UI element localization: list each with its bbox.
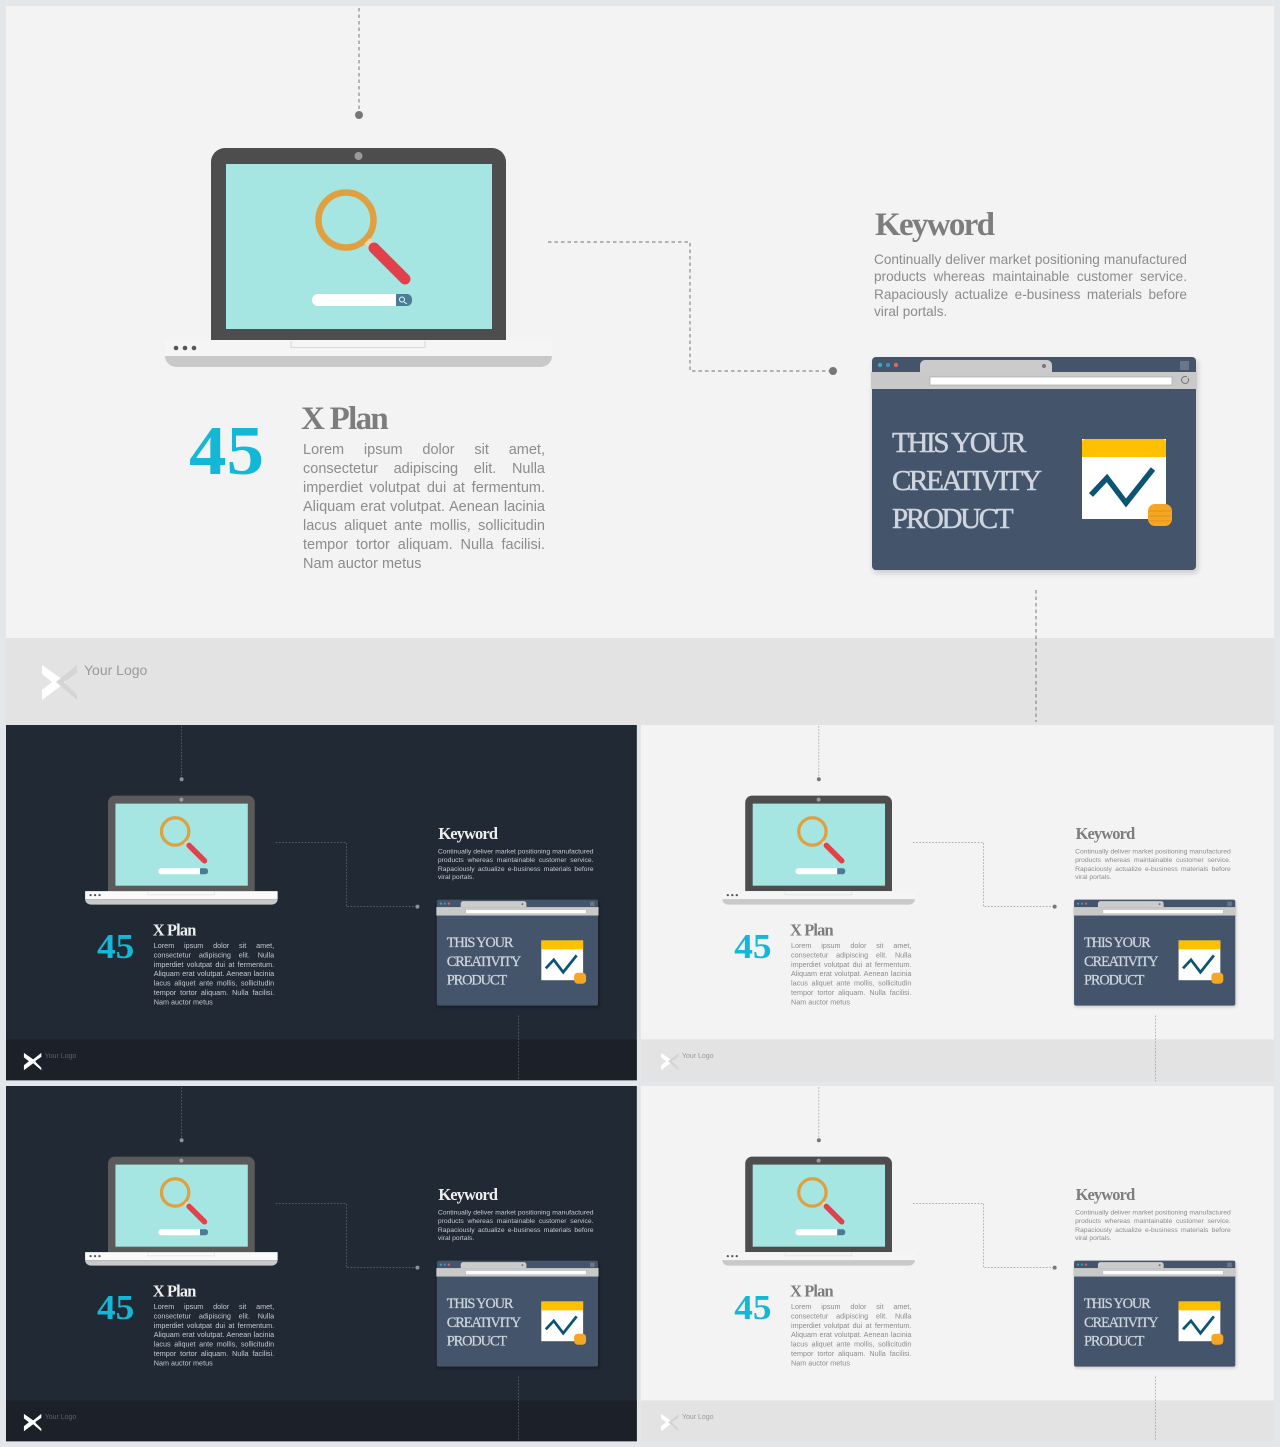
text block: X Plan description: tempor tortor aliquam. Nulla facilisi. — [791, 989, 911, 997]
connector: browser to bottom — [517, 1377, 519, 1442]
text block: Keyword description: Rapaciously actualize e-business materials before — [874, 286, 1187, 302]
text block: Keyword description: products whereas maintainable customer service. — [438, 1217, 594, 1224]
icon: browser window with product text: THIS YOUR — [892, 427, 1027, 459]
heading: Keyword: Keyword — [875, 207, 995, 243]
logo text: Your Logo — [682, 1414, 714, 1421]
heading: Keyword: Keyword — [1076, 1185, 1135, 1204]
text block: X Plan description: Lorem ipsum dolor sit amet, — [154, 1303, 274, 1311]
footer band — [641, 1039, 1275, 1084]
text block: Keyword description — [438, 1208, 594, 1242]
logo mark — [661, 1414, 679, 1431]
connector: laptop to browser — [276, 1203, 419, 1270]
logo text: Your Logo — [45, 1414, 76, 1421]
number 45: 45 — [189, 413, 264, 490]
connector: top line to laptop — [355, 8, 363, 119]
footer band — [6, 1039, 637, 1084]
text block: Keyword description: Continually deliver market positioning manufactured — [874, 252, 1187, 266]
heading: X Plan: X Plan — [301, 401, 388, 437]
text block: X Plan description — [303, 442, 545, 572]
text block: Keyword description: viral portals. — [874, 304, 947, 319]
text block: X Plan description: Aliquam erat volutpat. Aenean lacinia — [154, 970, 274, 978]
panel: dark slide, row 2 — [6, 1086, 637, 1441]
icon: browser window with product text: THIS YOUR — [447, 1296, 514, 1312]
heading: X Plan: X Plan — [153, 1281, 196, 1300]
connector: top line to laptop — [817, 1087, 821, 1142]
text block: X Plan description: Lorem ipsum dolor sit amet, — [791, 942, 911, 950]
panel: main light slide — [6, 6, 1274, 725]
icon: browser window with product text — [436, 1261, 599, 1368]
icon: browser window with product text — [436, 900, 599, 1007]
connector: laptop to browser — [548, 242, 837, 375]
connector: browser to bottom — [1035, 590, 1037, 722]
text block: X Plan description: imperdiet volutpat dui at fermentum. — [791, 961, 911, 969]
text block: X Plan description: lacus aliquet ante mollis, sollicitudin — [154, 1341, 274, 1349]
text block: X Plan description: lacus aliquet ante mollis, sollicitudin — [791, 1341, 911, 1349]
icon: browser window with product text: PRODUCT — [447, 1334, 507, 1350]
icon: browser window with product text: CREATIVITY — [892, 465, 1042, 497]
icon: laptop with magnifier — [722, 1157, 915, 1266]
logo text: Your Logo — [84, 662, 148, 678]
text block: X Plan description: tempor tortor aliquam. Nulla facilisi. — [154, 1350, 274, 1358]
text block: Keyword description: viral portals. — [1075, 1234, 1112, 1242]
text block: Keyword description: Rapaciously actualize e-business materials before — [1075, 865, 1231, 872]
text block: X Plan description: Aliquam erat volutpat. Aenean lacinia — [154, 1331, 274, 1339]
connector: top line to laptop — [180, 726, 184, 781]
icon: browser window with product text — [1074, 900, 1236, 1007]
icon: laptop with magnifier — [85, 796, 278, 905]
icon: browser window with product text: CREATIVITY — [1084, 954, 1159, 970]
text block: X Plan description: lacus aliquet ante mollis, sollicitudin — [303, 518, 545, 534]
logo text: Your Logo — [45, 1053, 76, 1060]
icon: laptop with magnifier — [85, 1157, 278, 1266]
connector: laptop to browser — [913, 1203, 1057, 1270]
text block: X Plan description: Lorem ipsum dolor sit amet, — [791, 1303, 911, 1311]
icon: laptop with magnifier — [722, 796, 915, 905]
connector: top line to laptop — [817, 726, 821, 781]
text block: X Plan description: Aliquam erat volutpat. Aenean lacinia — [791, 970, 911, 978]
heading: X Plan: X Plan — [790, 920, 834, 939]
text block: X Plan description: Lorem ipsum dolor sit amet, — [154, 942, 274, 950]
text block: Keyword description: Rapaciously actualize e-business materials before — [438, 1226, 594, 1233]
icon: browser window with product text: CREATIVITY — [447, 954, 522, 970]
text block: Keyword description — [874, 252, 1187, 319]
connector: browser to bottom — [1155, 1377, 1157, 1442]
text block: Keyword description: Rapaciously actualize e-business materials before — [438, 865, 594, 872]
icon: laptop with magnifier — [165, 148, 552, 367]
text block: X Plan description — [791, 1303, 912, 1368]
panel: dark slide, row 1 — [6, 725, 637, 1080]
heading: Keyword: Keyword — [438, 1185, 498, 1204]
connector: top line to laptop — [180, 1087, 184, 1142]
text block: X Plan description: tempor tortor aliquam. Nulla facilisi. — [303, 537, 545, 553]
text block: X Plan description: lacus aliquet ante mollis, sollicitudin — [791, 980, 911, 988]
logo mark — [42, 665, 77, 700]
text block: Keyword description: viral portals. — [1075, 873, 1112, 881]
connector: browser to bottom — [1155, 1016, 1157, 1081]
text block: Keyword description: products whereas maintainable customer service. — [1075, 1217, 1231, 1224]
text block: X Plan description: lacus aliquet ante mollis, sollicitudin — [154, 980, 274, 988]
icon: browser window with product text — [1074, 1261, 1236, 1368]
text block: X Plan description: Nam auctor metus — [303, 556, 421, 572]
icon: browser window with product text: THIS YOUR — [447, 935, 514, 951]
text block: X Plan description — [154, 942, 274, 1007]
text block: Keyword description: products whereas maintainable customer service. — [1075, 856, 1231, 863]
panel: light slide, row 2 — [641, 1086, 1274, 1441]
text block: Keyword description — [1075, 847, 1231, 881]
heading: X Plan: X Plan — [153, 920, 196, 939]
heading: Keyword: Keyword — [438, 824, 498, 843]
heading: Keyword: Keyword — [1076, 824, 1135, 843]
text block: X Plan description: Nam auctor metus — [791, 1360, 850, 1368]
text block: X Plan description: consectetur adipiscing elit. Nulla — [791, 951, 911, 959]
icon: browser window with product text: PRODUCT — [892, 503, 1014, 535]
text block: Keyword description: Continually deliver market positioning manufactured — [438, 847, 594, 855]
text block: Keyword description: products whereas maintainable customer service. — [874, 269, 1187, 284]
footer band — [641, 1400, 1275, 1445]
connector: laptop to browser — [276, 842, 419, 909]
text block: X Plan description: Nam auctor metus — [154, 999, 213, 1007]
text block: Keyword description: products whereas maintainable customer service. — [438, 856, 594, 863]
logo mark — [24, 1414, 41, 1431]
connector: laptop to browser — [913, 842, 1057, 909]
logo mark — [661, 1053, 679, 1070]
icon: browser window with product text — [871, 357, 1198, 573]
text block: Keyword description: Continually deliver market positioning manufactured — [438, 1208, 594, 1216]
text block: X Plan description — [791, 942, 912, 1007]
text block: X Plan description: tempor tortor aliquam. Nulla facilisi. — [791, 1350, 911, 1358]
footer band — [6, 1400, 637, 1445]
text block: Keyword description: viral portals. — [438, 1234, 474, 1242]
text block: Keyword description: viral portals. — [438, 873, 474, 881]
icon: browser window with product text: PRODUCT — [447, 973, 507, 989]
text block: X Plan description: Aliquam erat volutpat. Aenean lacinia — [791, 1331, 911, 1339]
icon: browser window with product text: CREATIVITY — [1084, 1315, 1159, 1331]
text block: X Plan description: consectetur adipiscing elit. Nulla — [791, 1312, 911, 1320]
footer band — [6, 638, 1274, 728]
text block: X Plan description: consectetur adipiscing elit. Nulla — [303, 461, 545, 477]
text block: X Plan description: imperdiet volutpat dui at fermentum. — [303, 480, 545, 496]
logo text: Your Logo — [682, 1053, 714, 1060]
text block: X Plan description: Nam auctor metus — [154, 1360, 213, 1368]
text block: Keyword description — [438, 847, 594, 881]
text block: X Plan description: imperdiet volutpat dui at fermentum. — [154, 961, 274, 969]
text block: X Plan description: imperdiet volutpat dui at fermentum. — [791, 1322, 911, 1330]
icon: browser window with product text: THIS YOUR — [1084, 1296, 1151, 1312]
icon: browser window with product text: PRODUCT — [1084, 973, 1145, 989]
number 45: 45 — [97, 927, 134, 966]
text block: Keyword description: Continually deliver market positioning manufactured — [1075, 1208, 1231, 1216]
text block: Keyword description: Continually deliver market positioning manufactured — [1075, 847, 1231, 855]
logo mark — [24, 1053, 41, 1070]
text block: X Plan description: consectetur adipiscing elit. Nulla — [154, 951, 274, 959]
number 45: 45 — [734, 1288, 772, 1327]
icon: browser window with product text: THIS YOUR — [1084, 935, 1151, 951]
text block: X Plan description: tempor tortor aliquam. Nulla facilisi. — [154, 989, 274, 997]
number 45: 45 — [734, 927, 772, 966]
text block: X Plan description: consectetur adipiscing elit. Nulla — [154, 1312, 274, 1320]
text block: X Plan description — [154, 1303, 274, 1368]
text block: X Plan description: Aliquam erat volutpat. Aenean lacinia — [303, 499, 545, 515]
number 45: 45 — [97, 1288, 134, 1327]
text block: Keyword description: Rapaciously actualize e-business materials before — [1075, 1226, 1231, 1233]
heading: X Plan: X Plan — [790, 1281, 834, 1300]
text block: X Plan description: imperdiet volutpat dui at fermentum. — [154, 1322, 274, 1330]
text block: X Plan description: Lorem ipsum dolor sit amet, — [303, 442, 545, 458]
connector: browser to bottom — [517, 1016, 519, 1081]
icon: browser window with product text: CREATIVITY — [447, 1315, 522, 1331]
text block: Keyword description — [1075, 1208, 1231, 1242]
icon: browser window with product text: PRODUCT — [1084, 1334, 1145, 1350]
text block: X Plan description: Nam auctor metus — [791, 999, 850, 1007]
panel: light slide, row 1 — [641, 725, 1274, 1082]
